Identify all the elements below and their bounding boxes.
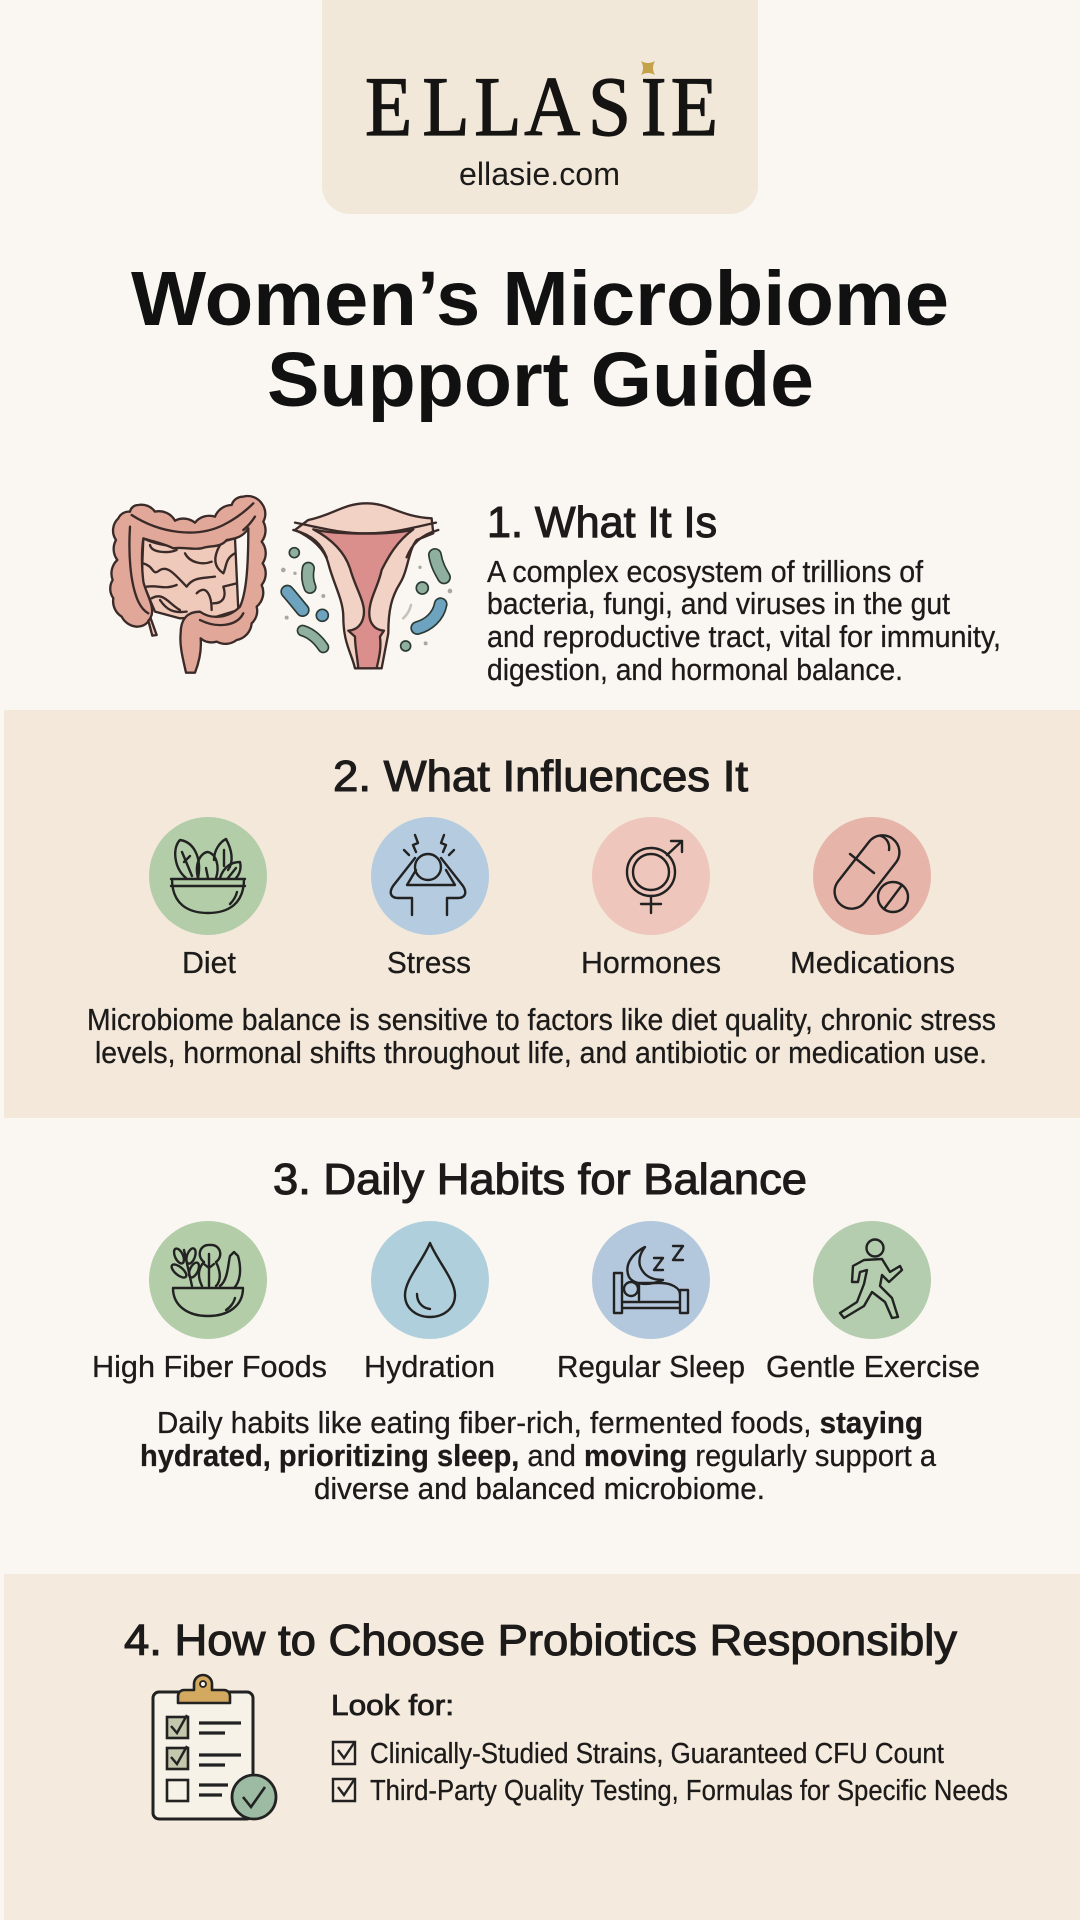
logo card: [322, 0, 758, 214]
illustration: intestines: [110, 496, 266, 673]
body: influences: Microbiome balance is sensitive to factors like diet quality, chronic stress: [87, 1003, 996, 1037]
labels: influences: Diet: [182, 945, 236, 980]
icon: high fiber foods: [149, 1221, 267, 1339]
icon: medications: [813, 817, 931, 935]
body: habits: diverse and balanced microbiome.: [314, 1472, 765, 1506]
labels: influences: Hormones: [581, 945, 721, 980]
panel: what it is: [110, 496, 1001, 687]
body: habits: Daily habits like eating fiber-rich, fermented foods, staying: [157, 1406, 923, 1440]
labels: influences: Medications: [790, 945, 955, 980]
body: habits: [140, 1406, 936, 1506]
labels: habits: High Fiber Foods: [92, 1349, 327, 1384]
icon: hydration: [371, 1221, 489, 1339]
body: what it is: digestion, and hormonal balance.: [487, 653, 903, 687]
body: influences: levels, hormonal shifts throughout life, and antibiotic or medication use.: [95, 1036, 987, 1070]
checklist: [333, 1738, 1008, 1807]
website: ellasie.com: [459, 156, 620, 192]
labels: influences: [182, 945, 955, 980]
labels: habits: Gentle Exercise: [766, 1349, 980, 1384]
body: influences: [87, 1003, 996, 1070]
panel: daily habits: [92, 1156, 980, 1506]
title: [131, 256, 949, 423]
body: what it is: and reproductive tract, vital for immunity,: [487, 620, 1001, 654]
labels: habits: Hydration: [364, 1349, 495, 1384]
panel: choosing probiotics: [4, 1574, 1080, 1920]
logo wordmark: ELLASIE: [365, 60, 718, 154]
item: strains and CFU: Clinically-Studied Strains, Guaranteed CFU Count: [370, 1738, 944, 1770]
heading: influences: 2. What Influences It: [333, 753, 748, 801]
heading: habits: 3. Daily Habits for Balance: [273, 1156, 807, 1204]
heading: probiotics: 4. How to Choose Probiotics Responsibly: [124, 1617, 957, 1665]
item: testing and formulas: Third-Party Quality Testing, Formulas for Specific Needs: [370, 1775, 1008, 1807]
title: Support Guide: [267, 337, 814, 423]
microbes: [281, 548, 452, 651]
body: habits: hydrated, prioritizing sleep, and moving regularly support a: [140, 1439, 936, 1473]
labels: habits: [92, 1349, 980, 1384]
icon: hormones: [592, 817, 710, 935]
look for heading: Look for:: [331, 1690, 454, 1722]
icon: diet: [149, 817, 267, 935]
title: Women’s Microbiome: [131, 256, 949, 342]
icon: stress: [371, 817, 489, 935]
body: what it is: [487, 555, 1001, 687]
labels: habits: Regular Sleep: [557, 1349, 745, 1384]
icon: gentle exercise: [813, 1221, 931, 1339]
heading: what it is: 1. What It Is: [487, 499, 717, 547]
body: what it is: bacteria, fungi, and viruses in the gut: [487, 587, 950, 621]
body: what it is: A complex ecosystem of trillions of: [487, 555, 923, 589]
icon: regular sleep: [592, 1221, 710, 1339]
logo gold star: [641, 61, 655, 75]
labels: influences: Stress: [387, 945, 471, 980]
illustration: reproductive tract and microbes: [281, 503, 452, 668]
panel: what influences it: [4, 710, 1080, 1118]
icon: clipboard checklist: [153, 1675, 276, 1819]
